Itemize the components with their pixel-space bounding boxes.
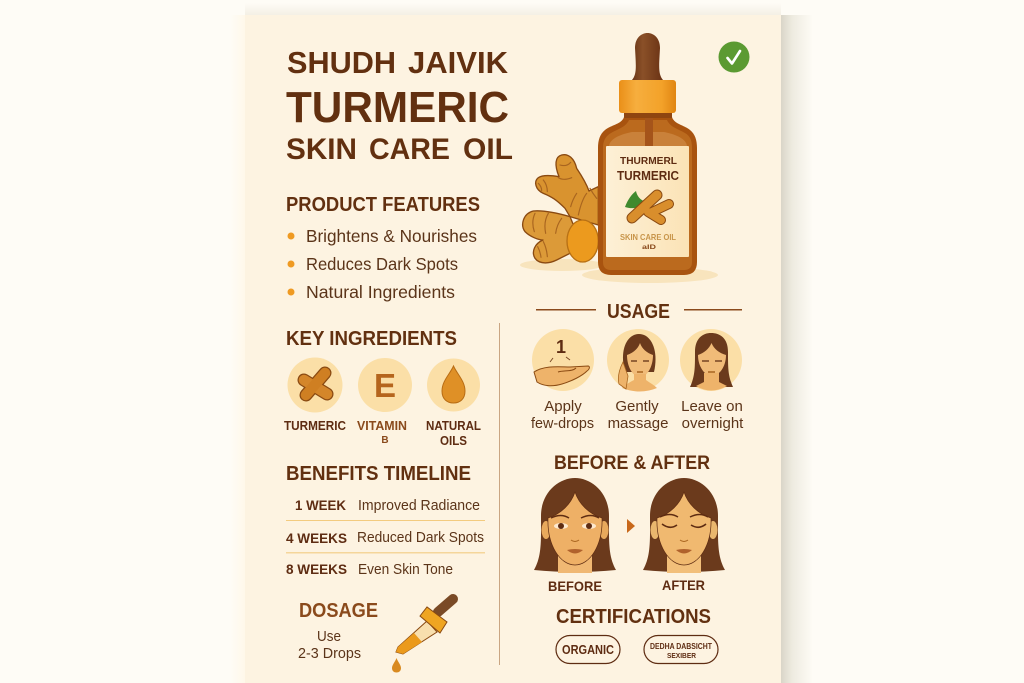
heading: benefits timeline: BENEFITS TIMELINE bbox=[286, 463, 471, 485]
icon: mini turmeric on label bbox=[625, 191, 669, 220]
icon: green check badge bbox=[718, 42, 750, 72]
panel: poster card bbox=[245, 15, 781, 683]
ingredient labels: TURMERIC bbox=[284, 419, 346, 433]
usage labels: massage bbox=[608, 415, 668, 432]
table: benefits timeline: 4 WEEKS bbox=[286, 530, 347, 546]
title: TURMERIC bbox=[286, 83, 509, 132]
table: benefits timeline bbox=[286, 497, 485, 578]
list: product features: Brightens & Nourishes bbox=[306, 226, 477, 246]
title bbox=[286, 45, 513, 166]
badge: second certification bbox=[644, 636, 718, 664]
panel: dosage bbox=[298, 599, 453, 672]
usage labels bbox=[531, 398, 744, 432]
bottle label text: TURMERIC bbox=[617, 168, 680, 183]
badge: organic bbox=[556, 636, 620, 664]
icon: apply drops on hand: 1 bbox=[556, 337, 566, 357]
badge: second certification: SEXIBER bbox=[667, 651, 697, 660]
badge: organic: ORGANIC bbox=[562, 642, 615, 657]
arrow: before to after bbox=[627, 519, 635, 533]
icon: oil bottle bbox=[582, 33, 718, 283]
heading: key ingredients: KEY INGREDIENTS bbox=[286, 328, 457, 350]
icon: vitamin E bbox=[358, 358, 412, 412]
list: product features bbox=[288, 226, 477, 302]
usage labels: overnight bbox=[682, 415, 744, 432]
heading: usage: USAGE bbox=[607, 301, 670, 323]
panel: dosage: 2-3 Drops bbox=[298, 645, 361, 662]
table: benefits timeline: Improved Radiance bbox=[358, 497, 480, 514]
illustration: before face bbox=[534, 478, 616, 573]
icon: vitamin E: E bbox=[374, 367, 396, 404]
table: benefits timeline: Reduced Dark Spots bbox=[357, 529, 484, 546]
ingredient labels: NATURAL bbox=[426, 419, 481, 433]
ingredient labels: VITAMIN bbox=[357, 419, 407, 433]
before and after labels: AFTER bbox=[662, 577, 705, 593]
usage labels: Gently bbox=[615, 398, 659, 415]
icon: turmeric root bbox=[520, 155, 604, 271]
bottle label text: aID bbox=[642, 244, 656, 251]
bottle label text: THURMERL bbox=[620, 155, 678, 167]
ingredient labels: B bbox=[381, 435, 389, 446]
icon: dropper bbox=[392, 599, 453, 672]
list: product features: Natural Ingredients bbox=[306, 282, 455, 302]
icon: apply drops on hand bbox=[532, 329, 594, 391]
before and after labels bbox=[548, 577, 705, 594]
title: CARE bbox=[369, 133, 450, 166]
panel: key ingredients icons bbox=[284, 358, 481, 448]
usage labels: Apply bbox=[544, 398, 582, 415]
icon: gentle massage bbox=[607, 329, 669, 392]
icon: leave on overnight bbox=[680, 329, 742, 391]
before and after labels: BEFORE bbox=[548, 578, 602, 594]
table: benefits timeline: 8 WEEKS bbox=[286, 561, 347, 577]
usage labels: Leave on bbox=[681, 398, 743, 415]
card shadow bbox=[230, 3, 813, 683]
heading: before and after: BEFORE & AFTER bbox=[554, 453, 710, 474]
ingredient labels: OILS bbox=[440, 434, 467, 448]
heading: certifications: CERTIFICATIONS bbox=[556, 606, 711, 628]
title: SKIN bbox=[286, 133, 357, 166]
panel: dosage: Use bbox=[317, 628, 341, 645]
illustration: after face bbox=[643, 478, 725, 573]
table: benefits timeline: 1 WEEK bbox=[295, 497, 346, 513]
list: product features: Reduces Dark Spots bbox=[306, 254, 458, 274]
usage labels: few-drops bbox=[531, 415, 594, 432]
icon: oil drop bbox=[427, 358, 480, 412]
heading: product features: PRODUCT FEATURES bbox=[286, 194, 480, 216]
ingredient labels bbox=[284, 419, 481, 448]
bottle label text bbox=[617, 155, 680, 251]
title: OIL bbox=[463, 133, 513, 166]
bottle label text: SKIN CARE OIL bbox=[620, 232, 676, 242]
title: JAIVIK bbox=[408, 45, 509, 80]
table: benefits timeline: Even Skin Tone bbox=[358, 561, 453, 578]
icon: turmeric bbox=[288, 358, 342, 412]
title: SHUDH bbox=[287, 45, 396, 80]
badge: second certification: DEDHA DABSICHT bbox=[650, 642, 712, 651]
panel: dosage: DOSAGE bbox=[299, 600, 378, 622]
center divider bbox=[499, 323, 500, 665]
